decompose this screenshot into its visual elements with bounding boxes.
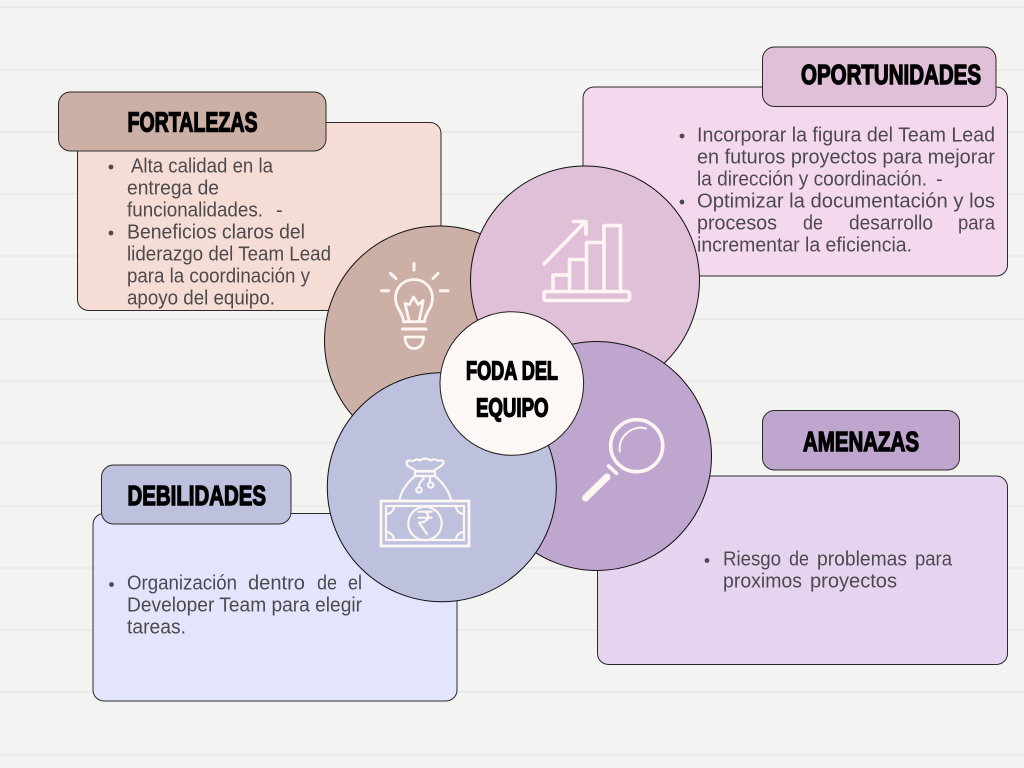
center circle: foda del equipo xyxy=(440,312,584,455)
panel: oportunidades xyxy=(583,47,1008,276)
icon: money bag and banknote xyxy=(381,459,469,546)
center title: FODA DEL xyxy=(466,358,558,386)
debilidades heading: DEBILIDADES xyxy=(128,480,266,511)
amenazas bullet list: problemas xyxy=(817,548,907,570)
oportunidades bullet list: de xyxy=(803,212,823,234)
panel: amenazas xyxy=(598,410,1008,664)
fortalezas bullet list: - xyxy=(276,200,283,222)
oportunidades bullet list: Optimizar la documentación y los xyxy=(697,190,995,212)
fortalezas bullet list: liderazgo del Team Lead xyxy=(127,244,331,266)
panel: debilidades xyxy=(93,465,457,701)
debilidades bullet list: tareas. xyxy=(127,616,186,638)
debilidades body box xyxy=(93,514,457,701)
oportunidades bullet list: desarrollo xyxy=(849,212,933,234)
oportunidades bullet list: procesos xyxy=(697,212,777,234)
fortalezas bullet list: Alta calidad en la xyxy=(131,156,274,178)
debilidades bullet list: de xyxy=(317,572,337,594)
amenazas bullet list: proximos xyxy=(723,570,802,592)
icon: magnifying glass xyxy=(586,420,663,498)
oportunidades heading tab xyxy=(762,47,996,106)
circle: amenazas xyxy=(482,342,712,570)
fortalezas heading: FORTALEZAS xyxy=(128,106,258,138)
amenazas heading tab xyxy=(762,410,960,470)
fortalezas bullet list: apoyo del equipo. xyxy=(127,288,275,310)
fortalezas bullet list: para la coordinación y xyxy=(127,266,310,288)
debilidades bullet list: dentro xyxy=(248,572,305,594)
debilidades bullet list: Organización xyxy=(127,572,237,594)
debilidades bullet list: el xyxy=(348,572,362,594)
amenazas bullet list: proyectos xyxy=(810,570,897,592)
icon: light bulb xyxy=(382,264,448,348)
oportunidades bullet list: para xyxy=(958,212,996,234)
amenazas bullet list: para xyxy=(915,548,953,570)
circle: debilidades xyxy=(327,373,556,602)
fortalezas heading tab xyxy=(58,92,326,151)
circle: oportunidades xyxy=(470,166,700,395)
amenazas body box xyxy=(598,476,1008,664)
debilidades bullet list xyxy=(109,572,362,638)
center title xyxy=(466,358,558,422)
oportunidades body box xyxy=(583,87,1008,276)
debilidades bullet list: Developer Team para elegir xyxy=(127,594,362,616)
circle: fortalezas xyxy=(324,226,554,455)
icon: growth bar chart xyxy=(544,222,630,300)
fortalezas bullet list: entrega de xyxy=(127,178,219,200)
debilidades heading tab xyxy=(102,465,291,524)
oportunidades bullet list xyxy=(680,124,996,256)
amenazas heading: AMENAZAS xyxy=(803,426,919,457)
amenazas bullet list: Riesgo xyxy=(723,548,781,570)
oportunidades bullet list: - xyxy=(936,168,943,190)
fortalezas body box xyxy=(78,122,441,310)
fortalezas bullet list: funcionalidades. xyxy=(127,200,263,222)
amenazas bullet list xyxy=(705,548,953,592)
amenazas bullet list: de xyxy=(789,548,809,570)
fortalezas bullet list xyxy=(109,156,331,310)
oportunidades bullet list: incrementar la eficiencia. xyxy=(697,234,912,256)
oportunidades bullet list: en futuros proyectos para mejorar xyxy=(697,146,995,168)
oportunidades bullet list: Incorporar la figura del Team Lead xyxy=(697,124,995,146)
panel: fortalezas xyxy=(58,92,441,310)
oportunidades bullet list: la dirección y coordinación. xyxy=(697,168,927,190)
fortalezas bullet list: Beneficios claros del xyxy=(127,222,305,244)
center title: EQUIPO xyxy=(476,394,548,422)
